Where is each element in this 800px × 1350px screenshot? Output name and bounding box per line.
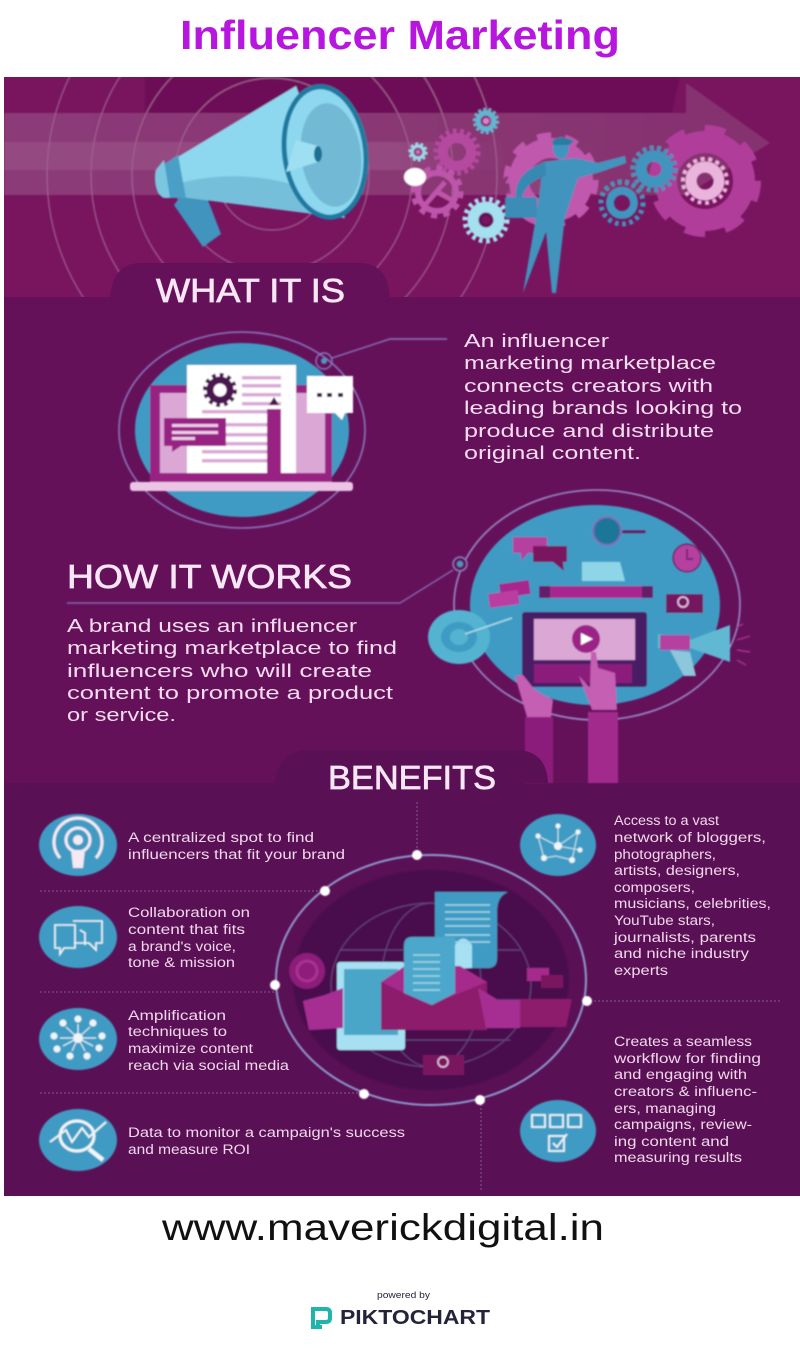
- icon: tablet with play button: [522, 612, 647, 687]
- text: amplification: Amplification: [128, 1008, 226, 1023]
- text: collaboration: Collaboration on: [128, 905, 250, 920]
- icon: tablet: [337, 962, 405, 1050]
- icon: letter: [404, 937, 455, 1005]
- text: collaboration: [128, 905, 250, 970]
- icon: money: [488, 580, 531, 608]
- benefit icon: influencer broadcast: [39, 814, 117, 876]
- text: data: and measure ROI: [128, 1142, 250, 1157]
- icon: small megaphone: [658, 624, 750, 676]
- gear glyph: [205, 375, 235, 405]
- text: access: and niche industry: [614, 946, 749, 961]
- text: access: network of bloggers,: [614, 830, 766, 845]
- text: how it works: or service.: [67, 705, 176, 725]
- text: access: [613, 813, 771, 978]
- text: centralized spot: A centralized spot to find: [128, 830, 314, 845]
- icon: clock: [673, 544, 701, 572]
- benefit icon: amplification: [39, 1008, 117, 1070]
- benefit icon: data monitor: [39, 1109, 117, 1171]
- text: workflow: Creates a seamless: [614, 1034, 752, 1049]
- text: what it is: [464, 331, 742, 463]
- heading tab: benefits: BENEFITS: [328, 759, 496, 796]
- icon: piktochart logo: [313, 1309, 330, 1327]
- text: workflow: and engaging with: [614, 1067, 747, 1082]
- text: workflow: ing content and: [614, 1134, 729, 1149]
- icon: target: [289, 953, 325, 989]
- website url: www.maverickdigital.in: [161, 1207, 604, 1248]
- powered by: powered by: [377, 1290, 431, 1300]
- text: access: Access to a vast: [614, 813, 719, 828]
- icon: scroll document: [435, 892, 508, 969]
- text: amplification: techniques to: [128, 1024, 227, 1039]
- heading: how it works: HOW IT WORKS: [67, 558, 352, 595]
- text: workflow: ers, managing: [614, 1101, 716, 1116]
- icon: chat bubbles: [527, 968, 563, 988]
- text: access: experts: [614, 963, 668, 978]
- text: access: journalists, parents: [613, 930, 756, 945]
- icon: handshake doc: [539, 562, 653, 598]
- text: amplification: [128, 1008, 290, 1073]
- text: access: musicians, celebrities,: [614, 896, 771, 911]
- icon: video: [423, 1055, 464, 1075]
- text: how it works: influencers who will create: [67, 661, 372, 681]
- text: collaboration: content that fits: [128, 922, 245, 937]
- text: what it is: original content.: [464, 443, 641, 463]
- text: what it is: An influencer: [464, 331, 609, 351]
- text: access: artists, designers,: [614, 863, 740, 878]
- text: workflow: workflow for finding: [613, 1051, 761, 1066]
- text: what it is: connects creators with: [464, 376, 713, 396]
- text: what it is: marketing marketplace: [464, 353, 716, 373]
- icon: hands: [303, 988, 572, 1030]
- text: data: Data to monitor a campaign's success: [128, 1125, 405, 1140]
- benefit icon: collaboration: [39, 906, 117, 968]
- illustration: how it works circle: [67, 490, 750, 783]
- heading tab: what it is: WHAT IT IS: [156, 272, 345, 309]
- icon: businessman pointing: [505, 137, 626, 293]
- illustration: benefits central circle: [270, 850, 592, 1105]
- icon: gears: [410, 110, 757, 241]
- text: what it is: leading brands looking to: [464, 398, 742, 418]
- text: access: YouTube stars,: [614, 913, 715, 928]
- icon: target: [428, 610, 512, 664]
- text: workflow: campaigns, review-: [614, 1117, 752, 1132]
- heading tab: benefits: [275, 750, 548, 796]
- title: Influencer Marketing: [180, 12, 620, 58]
- text: how it works: marketing marketplace to find: [67, 638, 397, 658]
- text: what it is: produce and distribute: [464, 421, 714, 441]
- text: access: composers,: [614, 880, 695, 895]
- sound wave arcs: [47, 0, 497, 400]
- dashed connectors: [40, 802, 780, 1190]
- icon: chat bubbles: [513, 537, 567, 571]
- connector dots: [270, 850, 592, 1105]
- header illustration: [4, 77, 770, 297]
- text: data: [128, 1125, 405, 1157]
- white dot: [404, 168, 426, 186]
- text: collaboration: tone & mission: [128, 955, 235, 970]
- benefit icon: workflow: [520, 1100, 596, 1162]
- text: collaboration: a brand's voice,: [128, 939, 236, 954]
- illustration: laptop with document: [119, 332, 447, 528]
- text: how it works: [67, 616, 397, 725]
- heading tab: what it is: [110, 263, 390, 309]
- benefits right text: [613, 813, 771, 1165]
- piktochart wordmark: PIKTOCHART: [340, 1307, 490, 1329]
- text: workflow: measuring results: [614, 1150, 742, 1165]
- icon: hands: [515, 652, 618, 783]
- icon: magnifier: [593, 517, 646, 545]
- text: access: photographers,: [614, 847, 716, 862]
- benefit icon: network: [520, 814, 596, 876]
- text: amplification: maximize content: [128, 1041, 253, 1056]
- connector to text: [316, 339, 447, 369]
- text: centralized spot: [128, 830, 345, 862]
- icon: envelope: [381, 963, 487, 1030]
- icon: video card: [666, 594, 703, 613]
- icon: megaphone: [155, 79, 376, 247]
- benefits left text: [128, 830, 405, 1157]
- text: how it works: A brand uses an influencer: [67, 616, 357, 636]
- text: workflow: creators & influenc-: [614, 1084, 757, 1099]
- text: how it works: content to promote a product: [67, 683, 393, 703]
- text: amplification: reach via social media: [128, 1058, 290, 1073]
- text: workflow: [613, 1034, 761, 1165]
- text: centralized spot: influencers that fit your brand: [128, 847, 345, 862]
